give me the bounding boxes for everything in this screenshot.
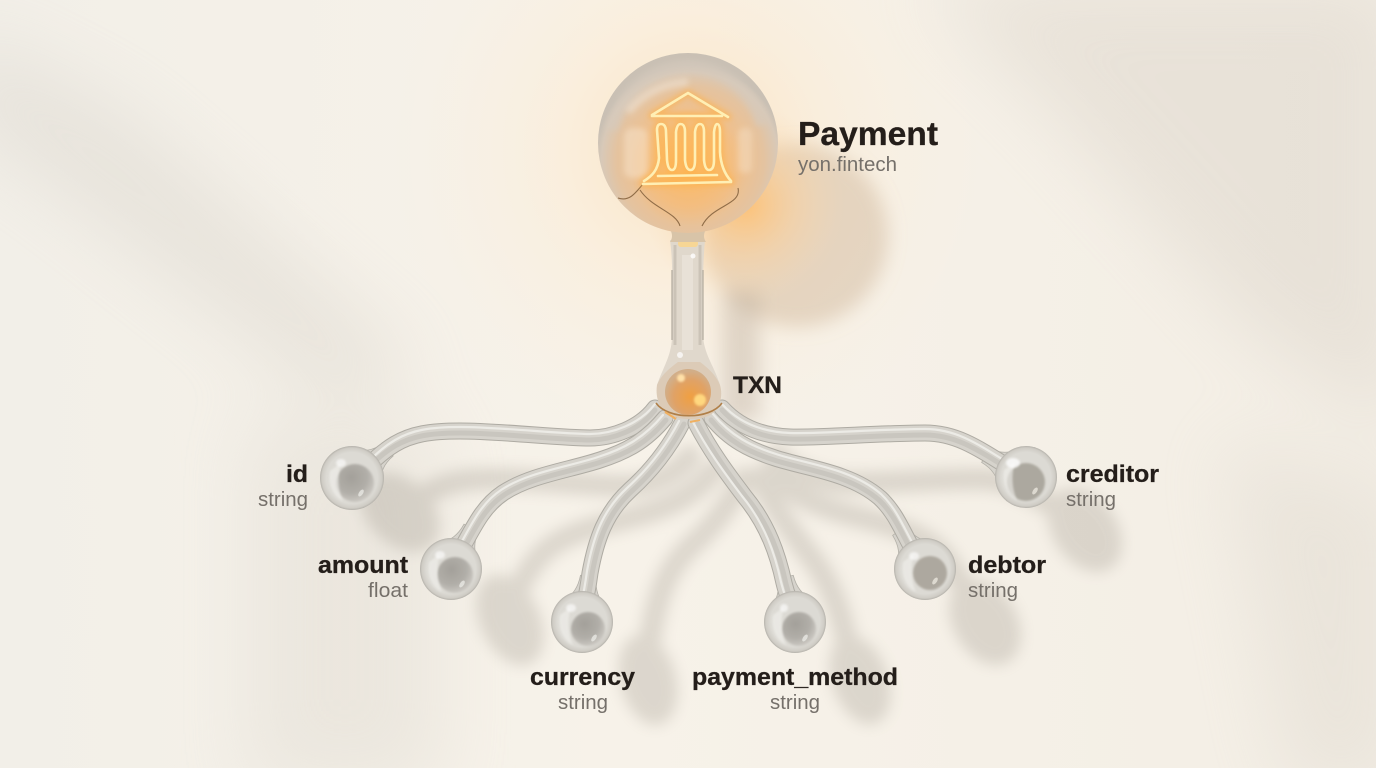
title: Payment: Payment [798, 115, 938, 152]
droplet: payment_method [764, 591, 826, 653]
tube: payment_method [693, 422, 794, 607]
label: amount: float [368, 580, 408, 602]
warm glow [350, 0, 1050, 480]
label: id: string [258, 489, 308, 511]
droplet: debtor [894, 538, 956, 600]
label: TXN: TXN [733, 372, 782, 399]
junction node TXN [656, 362, 722, 422]
label: debtor [968, 552, 1046, 602]
label: currency [530, 664, 636, 714]
icon: bank filament glow [643, 93, 731, 184]
tube: currency [581, 421, 684, 607]
shadows: tubes and droplets [345, 454, 1138, 733]
label: creditor: creditor [1066, 461, 1159, 488]
title: Payment [798, 115, 938, 176]
label: payment_method: string [770, 692, 820, 714]
label: id: id [286, 461, 308, 488]
label: creditor: string [1066, 489, 1116, 511]
droplet: creditor [995, 446, 1057, 508]
label: creditor [1066, 461, 1159, 511]
label: debtor: debtor [968, 552, 1046, 579]
label: debtor: string [968, 580, 1018, 602]
shadow: bulb and stem [706, 145, 888, 420]
label: currency: currency [530, 664, 636, 691]
tube: debtor [711, 414, 913, 550]
glass tubes [370, 404, 1010, 607]
glass bulb with bank filament [598, 53, 778, 242]
tube: amount [460, 415, 666, 550]
label: amount [318, 552, 408, 602]
title: Payment: yon.fintech [798, 154, 897, 176]
label: payment_method: payment_method [692, 664, 898, 691]
droplet necks [338, 426, 1035, 622]
label: payment_method [692, 664, 898, 714]
droplet: id [320, 446, 384, 510]
droplet: amount [420, 538, 482, 600]
tube: id [370, 404, 655, 466]
orange glow beneath bulb [640, 100, 850, 310]
label: id [258, 461, 308, 511]
glass stem [657, 240, 720, 385]
tube: creditor [722, 404, 1010, 470]
label: amount: amount [318, 552, 408, 579]
label: currency: string [558, 692, 608, 714]
droplet: currency [551, 591, 613, 653]
